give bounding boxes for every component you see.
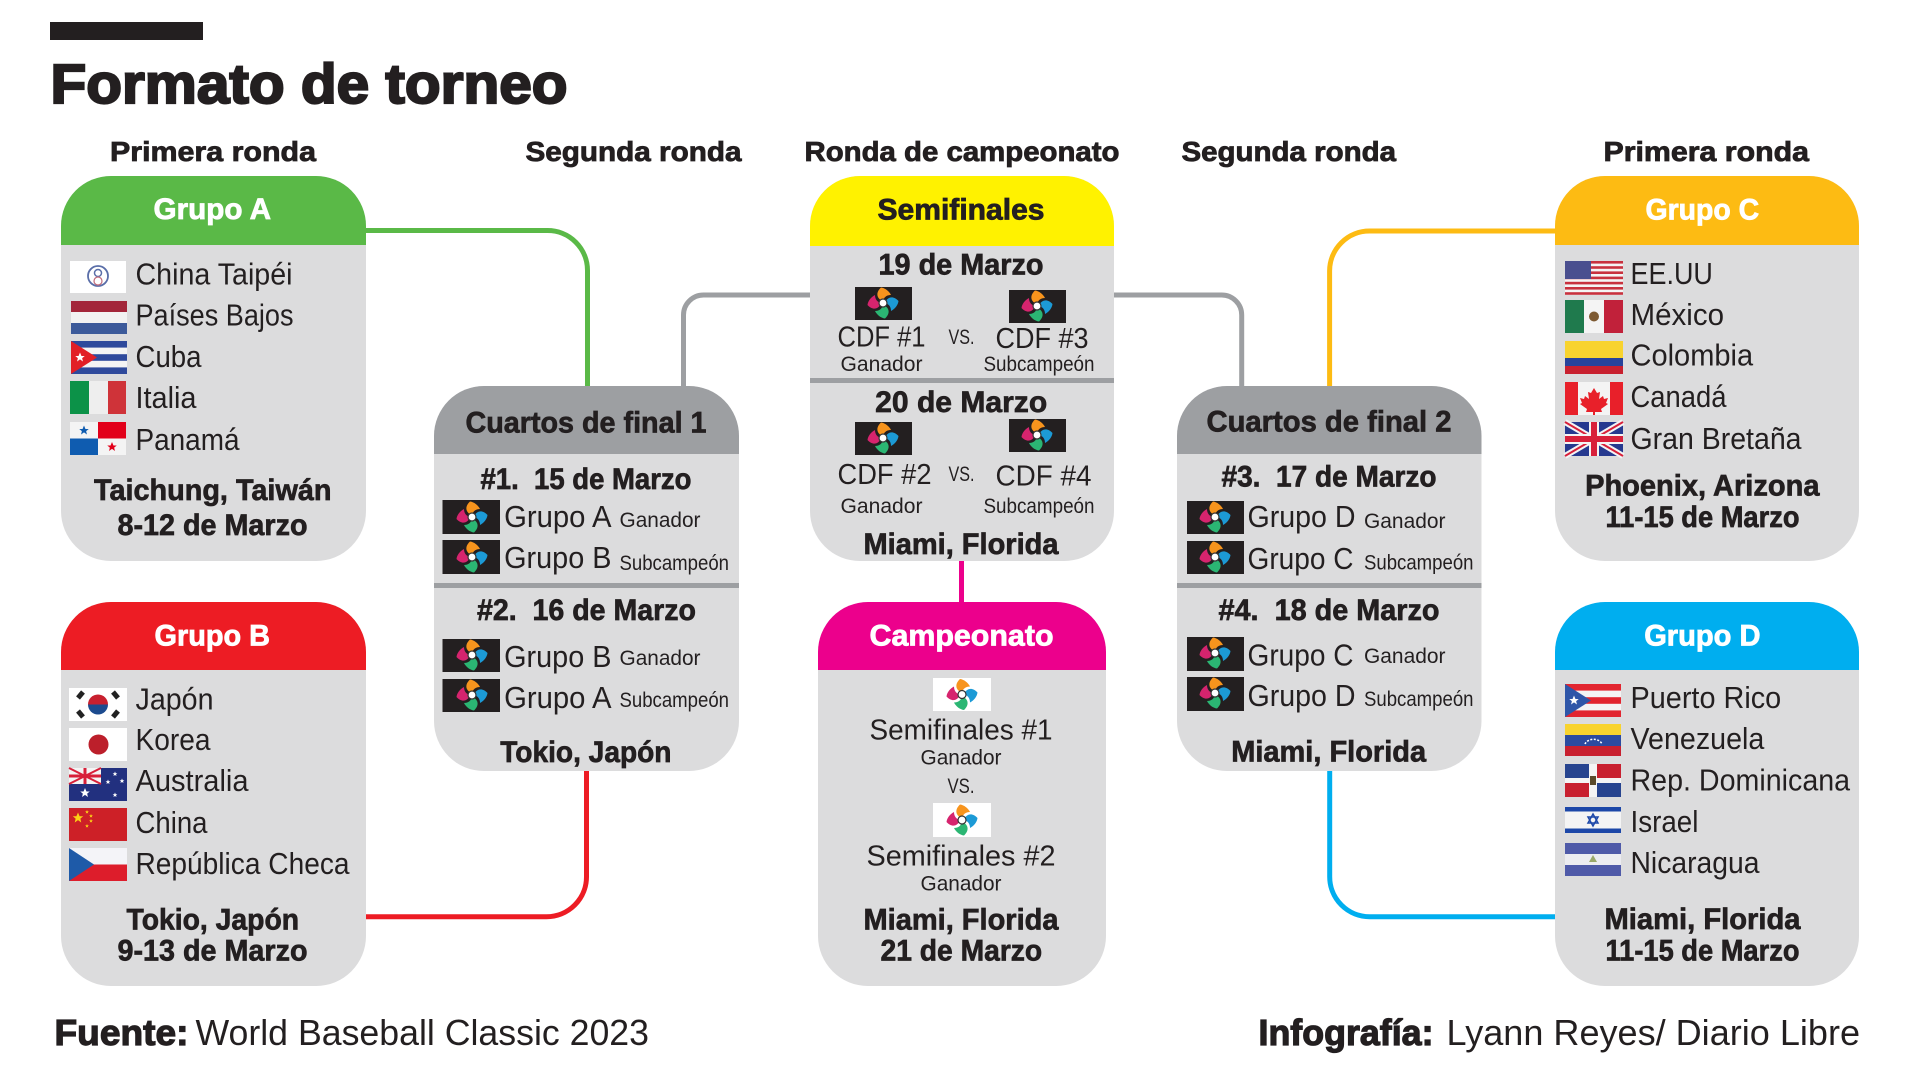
flag: China Taipéi — [70, 261, 126, 293]
panel: Grupo A — [61, 176, 366, 561]
title bar — [50, 22, 203, 40]
flag: Colombia — [1565, 341, 1623, 374]
logo — [442, 500, 500, 534]
team: Grupo A Ganador: Grupo A — [504, 499, 612, 534]
logo — [1187, 677, 1244, 711]
infographic credit — [1258, 1012, 1860, 1053]
venue: Miami final: 21 de Marzo — [880, 935, 1042, 968]
header: Campeonato: Campeonato — [870, 620, 1054, 653]
flag: República Checa — [69, 848, 127, 881]
country: Japón: Japón — [136, 682, 214, 717]
panel: Semifinales — [810, 176, 1114, 561]
venue: Tokio: 9-13 de Marzo — [118, 935, 308, 968]
flag: Gran Bretaña — [1565, 422, 1623, 456]
match date #1: #1. 15 de Marzo — [480, 463, 692, 496]
venue: Tokio — [118, 904, 308, 968]
country: Australia: Australia — [136, 763, 249, 798]
connector: Grupo C to Cuartos 2 — [1330, 231, 1555, 387]
flag: Israel — [1565, 807, 1621, 833]
team: Grupo B Ganador: Grupo B — [504, 639, 612, 674]
connector: Grupo A to Cuartos 1 — [366, 230, 588, 387]
team: Grupo D Subcampeón: Grupo D — [1248, 678, 1356, 713]
infographic credit: Infografía: — [1258, 1012, 1434, 1053]
logo — [933, 803, 991, 837]
country: Korea: Korea — [136, 722, 211, 757]
header: Grupo A — [61, 176, 366, 245]
team: Grupo B Subcampeón: Grupo B — [504, 540, 612, 575]
country: Cuba: Cuba — [136, 339, 202, 374]
team: Grupo C Subcampeón: Grupo C — [1248, 541, 1354, 576]
venue: Miami: Miami, Florida — [1231, 736, 1426, 769]
header: Grupo D: Grupo D — [1644, 620, 1760, 653]
logo — [1009, 290, 1066, 323]
header: Grupo D — [1555, 602, 1859, 670]
team: Grupo B Ganador — [504, 639, 700, 674]
team: Grupo D Ganador — [1248, 499, 1446, 534]
country: Canadá: Canadá — [1630, 379, 1727, 414]
flag: Puerto Rico — [1565, 684, 1621, 717]
logo — [442, 679, 500, 712]
match: CDF #2 vs CDF #4: CDF #2 — [838, 459, 932, 491]
logo — [1187, 637, 1244, 671]
venue: Tokio: Tokio, Japón — [126, 904, 299, 937]
team: Grupo C Subcampeón — [1248, 541, 1474, 576]
flag: Venezuela — [1565, 724, 1621, 756]
team: Grupo C Ganador — [1248, 638, 1446, 673]
connector: Grupo D to Cuartos 2 — [1330, 770, 1555, 917]
semifinal 2 winner: Ganador — [920, 873, 1002, 896]
match: CDF #2 vs CDF #4 — [838, 459, 1094, 518]
team: Grupo D Ganador: Ganador — [1364, 510, 1446, 533]
panel: Campeonato — [818, 602, 1106, 986]
semifinal 1 winner: Ganador — [920, 747, 1002, 770]
flag: Nicaragua — [1565, 843, 1621, 876]
team: Grupo D Ganador: Grupo D — [1248, 499, 1356, 534]
venue: Phoenix: 11-15 de Marzo — [1606, 501, 1800, 534]
match: CDF #2 vs CDF #4: Subcampeón — [984, 495, 1094, 518]
logo — [1187, 541, 1244, 574]
date: 19 de Marzo: 19 de Marzo — [878, 249, 1044, 282]
logo — [933, 678, 991, 711]
team: Grupo B Subcampeón — [504, 540, 729, 575]
team: Grupo A Subcampeón: Grupo A — [504, 680, 612, 715]
venue: Miami final — [864, 904, 1059, 968]
round headings: Primera ronda — [110, 136, 316, 167]
flag: Corea — [69, 688, 127, 721]
team: Grupo B Subcampeón: Subcampeón — [620, 552, 729, 575]
semifinal 2 winner: Semifinales #2 — [866, 841, 1056, 873]
country: Italia: Italia — [136, 380, 197, 415]
team: Grupo A Ganador — [504, 499, 700, 534]
infographic credit: Lyann Reyes/ Diario Libre — [1446, 1012, 1860, 1053]
match: CDF #1 vs CDF #3: Subcampeón — [984, 353, 1094, 376]
header: Grupo B: Grupo B — [154, 620, 270, 653]
header: Grupo C — [1555, 176, 1859, 245]
team: Grupo D Subcampeón: Subcampeón — [1364, 688, 1474, 711]
match: CDF #2 vs CDF #4: CDF #4 — [996, 461, 1092, 493]
flag: China — [69, 808, 127, 841]
flag: Canadá — [1565, 382, 1623, 415]
round headings: Segunda ronda — [526, 136, 742, 167]
logo — [1009, 419, 1066, 452]
team: Grupo A Subcampeón: Subcampeón — [620, 689, 729, 712]
connector: Cuartos 1 to Semifinales — [684, 295, 810, 387]
team: Grupo D Subcampeón — [1248, 678, 1474, 713]
country: Puerto Rico: Puerto Rico — [1630, 680, 1781, 715]
round headings: Primera ronda — [1604, 136, 1809, 167]
match: CDF #1 vs CDF #3: VS. — [948, 326, 974, 349]
source credit: World Baseball Classic 2023 — [196, 1012, 649, 1053]
panel: Grupo D — [1555, 602, 1859, 986]
date: 20 de Marzo: 20 de Marzo — [875, 386, 1047, 419]
venue: Taichung — [94, 474, 332, 542]
country: Rep. Dominicana: Rep. Dominicana — [1630, 763, 1851, 798]
match date #4: #4. 18 de Marzo — [1218, 594, 1440, 627]
venue: Miami — [1604, 903, 1801, 968]
country: Israel: Israel — [1630, 804, 1698, 839]
match: CDF #2 vs CDF #4: VS. — [948, 463, 974, 486]
match: CDF #1 vs CDF #3: Ganador — [840, 353, 922, 376]
country: EE.UU: EE.UU — [1630, 256, 1713, 291]
round headings — [110, 136, 1809, 167]
round headings: Segunda ronda — [1182, 136, 1396, 167]
header: Semifinales: Semifinales — [878, 194, 1044, 227]
panel: Grupo B — [61, 602, 366, 986]
match date #3: #3. 17 de Marzo — [1222, 461, 1436, 494]
venue: Taichung: 8-12 de Marzo — [118, 509, 308, 542]
venue: Phoenix — [1585, 470, 1820, 534]
connector: Grupo B to Cuartos 1 — [366, 770, 586, 917]
logo — [1187, 501, 1244, 534]
match: CDF #1 vs CDF #3 — [838, 322, 1094, 376]
header: Semifinales — [810, 176, 1114, 246]
logo — [855, 287, 912, 320]
venue: Tokio: Tokio, Japón — [500, 736, 672, 769]
venue: Miami: Miami, Florida — [1604, 903, 1801, 936]
logo — [442, 639, 500, 672]
header: Cuartos de final 2: Cuartos de final 2 — [1206, 406, 1452, 439]
header: Grupo A: Grupo A — [154, 193, 271, 226]
flag: Panamá — [70, 422, 126, 455]
versus: VS. — [948, 775, 974, 798]
match: CDF #1 vs CDF #3: CDF #3 — [996, 323, 1088, 355]
country: Panamá: Panamá — [136, 422, 240, 457]
match date #2: #2. 16 de Marzo — [477, 594, 696, 627]
venue: Miami: 11-15 de Marzo — [1606, 935, 1800, 968]
panel: Grupo C — [1555, 176, 1859, 561]
flag: México — [1565, 300, 1623, 333]
country: Gran Bretaña: Gran Bretaña — [1630, 421, 1802, 456]
country: Colombia: Colombia — [1630, 338, 1754, 373]
header: Cuartos de final 1 — [434, 386, 739, 454]
venue: Miami final: Miami, Florida — [864, 904, 1059, 937]
title: Formato de torneo — [50, 52, 568, 115]
header: Cuartos de final 2 — [1177, 386, 1482, 454]
country: República Checa: República Checa — [136, 846, 350, 881]
connector: Semifinales to Cuartos 2 — [1114, 295, 1242, 387]
country: Países Bajos: Países Bajos — [136, 298, 294, 332]
match: CDF #1 vs CDF #3: CDF #1 — [838, 322, 926, 354]
source credit: Fuente: — [54, 1012, 188, 1053]
flag: Italia — [70, 381, 126, 414]
team: Grupo A Subcampeón — [504, 680, 729, 715]
connector: Semifinales to Campeonato — [959, 561, 964, 602]
round headings: Ronda de campeonato — [804, 136, 1120, 167]
flag: Cuba — [71, 341, 127, 374]
flag: Japón — [69, 728, 127, 761]
venue: Phoenix: Phoenix, Arizona — [1585, 470, 1820, 503]
country: Venezuela: Venezuela — [1630, 721, 1765, 756]
panel: Cuartos de final 2 — [1177, 386, 1482, 771]
country: China: China — [136, 805, 208, 840]
country: México: México — [1630, 297, 1724, 332]
team: Grupo B Ganador: Ganador — [620, 647, 700, 670]
team: Grupo C Ganador: Ganador — [1364, 645, 1446, 668]
header: Cuartos de final 1: Cuartos de final 1 — [466, 406, 706, 440]
header: Grupo C: Grupo C — [1646, 194, 1759, 227]
semifinal 1 winner: Semifinales #1 — [870, 715, 1052, 747]
semifinal 2 winner — [866, 841, 1056, 896]
match: CDF #2 vs CDF #4: Ganador — [840, 495, 922, 518]
logo — [855, 422, 912, 455]
flag: Países Bajos — [71, 301, 127, 334]
venue: Miami: Miami, Florida — [864, 528, 1059, 561]
team: Grupo C Subcampeón: Subcampeón — [1364, 552, 1474, 575]
country: Nicaragua: Nicaragua — [1630, 845, 1760, 880]
header: Campeonato — [818, 602, 1106, 670]
flag: Rep. Dominicana — [1565, 764, 1621, 797]
team: Grupo A Ganador: Ganador — [620, 509, 700, 532]
country: China Taipéi: China Taipéi — [136, 256, 292, 292]
flag: Australia — [69, 768, 127, 801]
team: Grupo C Ganador: Grupo C — [1248, 638, 1354, 673]
logo — [442, 540, 500, 574]
header: Grupo B — [61, 602, 366, 670]
venue: Taichung: Taichung, Taiwán — [94, 474, 332, 507]
panel: Cuartos de final 1 — [434, 386, 739, 771]
semifinal 1 winner — [870, 715, 1052, 770]
flag: EE.UU — [1565, 261, 1623, 295]
